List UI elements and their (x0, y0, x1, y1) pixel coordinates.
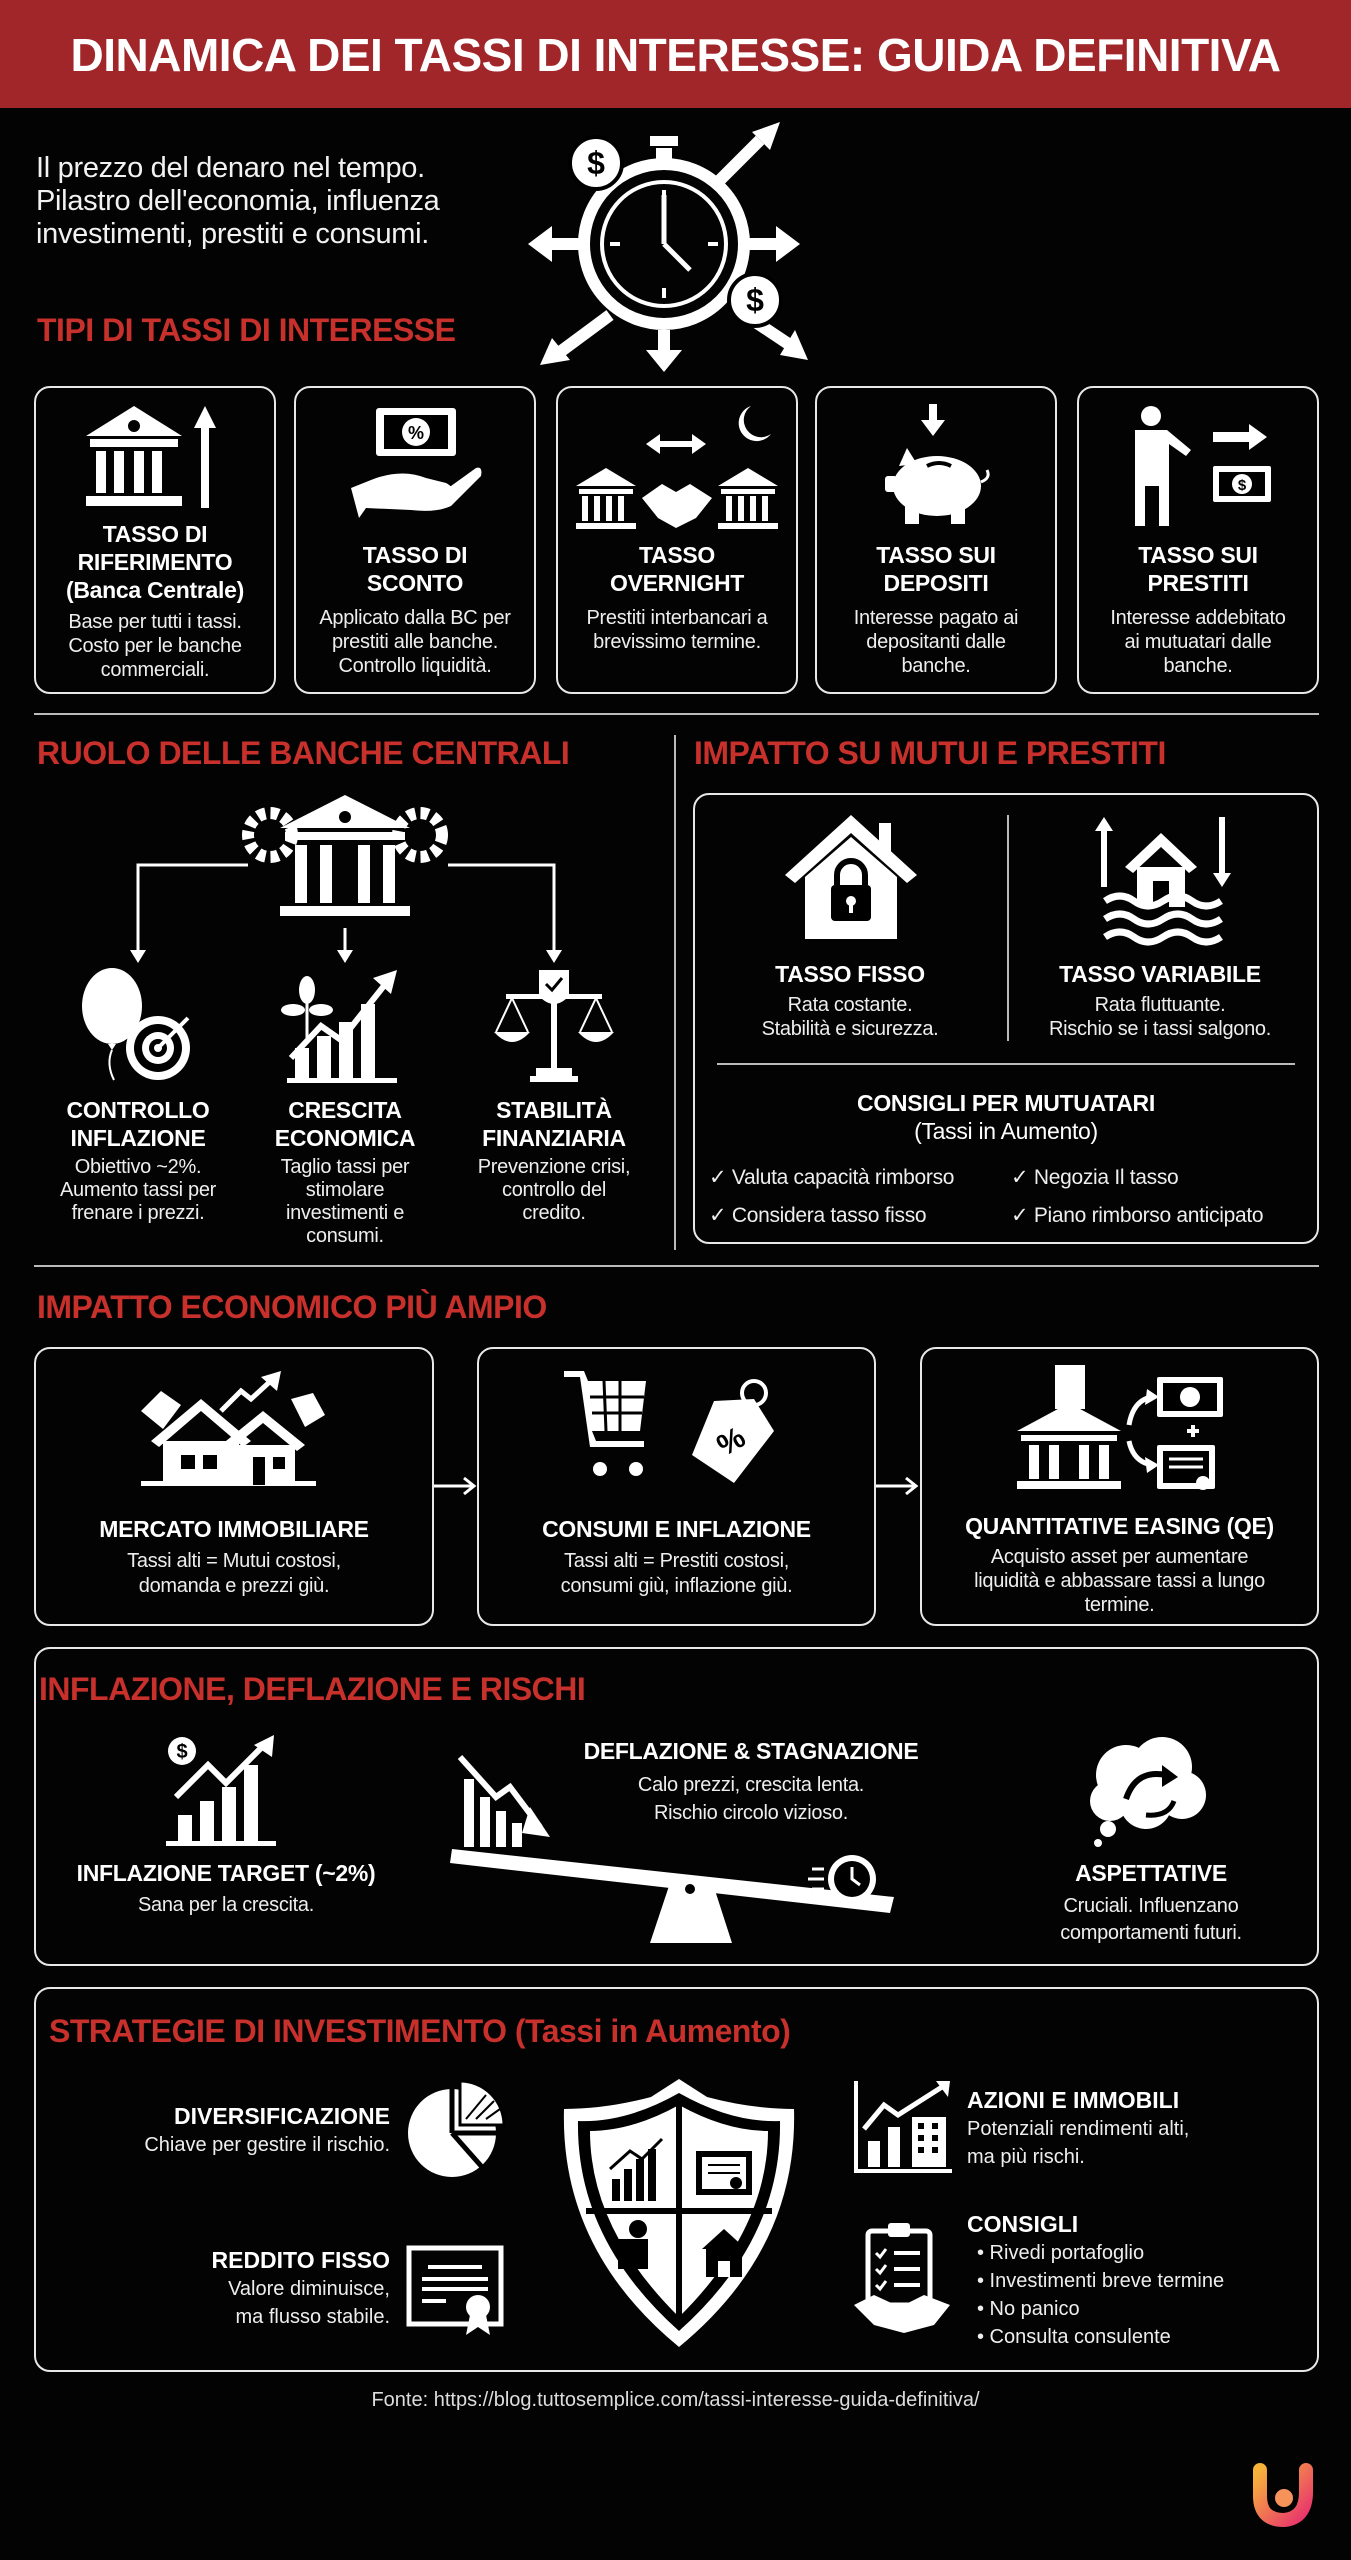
icon: hand with banknote (351, 408, 482, 518)
desc (1049, 994, 1271, 1040)
card desc: depositanti dalle (866, 631, 1006, 653)
text: azioni e immobili: AZIONI E IMMOBILI (967, 2087, 1179, 2113)
arrow (434, 1476, 476, 1496)
subheading: consigli per mutuatari: CONSIGLI PER MUTUATARI (857, 1090, 1155, 1116)
card title: RIFERIMENTO (78, 549, 232, 575)
text: azioni e immobili: Potenziali rendimenti alti, (967, 2118, 1189, 2140)
text: diversificazione: DIVERSIFICAZIONE (174, 2103, 390, 2129)
checklist: ✓ Piano rimborso anticipato (1011, 1204, 1263, 1227)
title: DINAMICA DEI TASSI DI INTERESSE: GUIDA DEFINITIVA (71, 29, 1280, 81)
header band (0, 0, 1351, 108)
text: azioni e immobili (967, 2085, 1307, 2171)
card title (1138, 542, 1258, 596)
desc (127, 1550, 341, 1597)
desc: Calo prezzi, crescita lenta. (638, 1774, 864, 1796)
checklist: ✓ Valuta capacità rimborso (709, 1166, 954, 1189)
card desc (854, 607, 1018, 677)
desc (536, 1771, 966, 1827)
panel: tasso overnight (556, 386, 798, 694)
icon: central bank with gears and arrows (130, 795, 562, 963)
icon: cart and tag (564, 1371, 774, 1483)
desc: investimenti e (286, 1202, 404, 1224)
desc (762, 994, 938, 1040)
desc: Taglio tassi per (281, 1156, 409, 1178)
icon: house with lock (785, 815, 917, 939)
title: deflazione: DEFLAZIONE & STAGNAZIONE (584, 1738, 918, 1764)
card title: (Banca Centrale) (66, 577, 244, 603)
desc: Stabilità e sicurezza. (762, 1018, 938, 1040)
title: QUANTITATIVE EASING (QE) (965, 1513, 1274, 1539)
title (275, 1097, 415, 1151)
desc: consumi. (306, 1225, 384, 1247)
title: tasso variabile: TASSO VARIABILE (1059, 961, 1261, 987)
column: controllo inflazione (60, 968, 216, 1224)
card title: TASSO DI (103, 521, 207, 547)
icon: hand with banknote: % (408, 423, 424, 443)
desc: frenare i prezzi. (72, 1202, 204, 1224)
intro text: Il prezzo del denaro nel tempo. (36, 152, 425, 184)
card title: TASSO (639, 542, 715, 568)
text: consigli: • Investimenti breve termine (977, 2270, 1224, 2292)
panel: consumi e inflazione (477, 1347, 876, 1626)
subheading: consigli per mutuatari (857, 1090, 1155, 1144)
text: reddito fisso: ma flusso stabile. (235, 2306, 390, 2328)
desc: Obiettivo ~2%. (75, 1156, 201, 1178)
icon: seesaw deflation (450, 1757, 910, 1942)
card desc: Costo per le banche (68, 635, 242, 657)
panel: quantitative easing (920, 1347, 1319, 1626)
panel: mutui e prestiti (693, 793, 1319, 1244)
card desc: Interesse pagato ai (854, 607, 1018, 629)
panel: tasso sui prestiti (1077, 386, 1319, 694)
card title (363, 542, 467, 596)
heading: impatto economico: IMPATTO ECONOMICO PIÙ AMPIO (37, 1289, 547, 1325)
icon: inflation chart: $ (176, 1741, 188, 1763)
desc: liquidità e abbassare tassi a lungo (974, 1570, 1265, 1592)
heading: STRATEGIE DI INVESTIMENTO (Tassi in Aumento) (49, 2013, 790, 2049)
card title (876, 542, 996, 596)
title: CONTROLLO (67, 1097, 209, 1123)
icon: certificate (406, 2245, 506, 2335)
card desc: banche. (901, 655, 971, 677)
desc: Aumento tassi per (60, 1179, 216, 1201)
checklist (709, 1166, 1263, 1227)
icon: houses with price tags (141, 1371, 325, 1486)
card title: SCONTO (367, 570, 463, 596)
panel: inflazione deflazione rischi (34, 1647, 1319, 1966)
title: STABILITÀ (496, 1097, 612, 1123)
card title: TASSO SUI (1138, 542, 1258, 568)
card desc: ai mutuatari dalle (1125, 631, 1271, 653)
desc: comportamenti futuri. (1060, 1922, 1242, 1944)
panel: strategie di investimento (34, 1987, 1319, 2372)
text: reddito fisso (76, 2245, 390, 2331)
desc: credito. (522, 1202, 586, 1224)
card desc: Applicato dalla BC per (319, 607, 511, 629)
text: consigli: CONSIGLI (967, 2211, 1078, 2237)
arrow (876, 1476, 921, 1496)
card desc (319, 607, 511, 677)
column: stabilità finanziaria (478, 970, 630, 1224)
heading: impatto su mutui: IMPATTO SU MUTUI E PRESTITI (694, 735, 1166, 771)
desc (1016, 1893, 1286, 1947)
icon: scales with shield (494, 970, 614, 1082)
icon: plant growth chart (281, 970, 397, 1083)
card desc: Base per tutti i tassi. (68, 611, 242, 633)
icon: clock with arrows: $ (746, 282, 764, 318)
icon: shield (562, 2079, 796, 2347)
desc (478, 1156, 630, 1224)
intro text (36, 152, 440, 250)
panel: mercato immobiliare (34, 1347, 434, 1626)
text: reddito fisso: REDDITO FISSO (212, 2247, 390, 2273)
desc: Sana per la crescita. (138, 1894, 314, 1916)
card desc: commerciali. (101, 659, 209, 681)
icon: person with banknote (1135, 406, 1271, 526)
desc: domanda e prezzi giù. (139, 1575, 329, 1597)
checklist: ✓ Considera tasso fisso (709, 1204, 926, 1227)
card desc: Interesse addebitato (1110, 607, 1286, 629)
desc: Tassi alti = Prestiti costosi, (564, 1550, 789, 1572)
text: reddito fisso: Valore diminuisce, (228, 2278, 390, 2300)
title: aspettative: ASPETTATIVE (1075, 1860, 1227, 1886)
text: consigli: • Rivedi portafoglio (977, 2242, 1144, 2264)
panel: tasso di riferimento (34, 386, 276, 694)
title: ECONOMICA (275, 1125, 415, 1151)
icon: banks handshake moon (576, 406, 778, 529)
card title: TASSO SUI (876, 542, 996, 568)
icon: bank with up arrow (86, 406, 216, 508)
card title: DEPOSITI (884, 570, 988, 596)
text: azioni e immobili: ma più rischi. (967, 2146, 1085, 2168)
title: CONSUMI E INFLAZIONE (542, 1516, 811, 1542)
text: diversificazione (76, 2101, 390, 2159)
icon: piggy bank (885, 404, 990, 524)
title: CRESCITA (288, 1097, 402, 1123)
icon: balloon and target (82, 968, 190, 1080)
card desc: banche. (1163, 655, 1233, 677)
icon: clock with arrows (528, 122, 808, 372)
icon: inflation chart (166, 1735, 281, 1847)
card desc (587, 607, 768, 653)
heading: tipi di tassi: TIPI DI TASSI DI INTERESSE (37, 312, 455, 348)
panel: tasso di sconto (294, 386, 536, 694)
desc: Tassi alti = Mutui costosi, (127, 1550, 341, 1572)
heading: INFLAZIONE, DEFLAZIONE E RISCHI (39, 1671, 585, 1707)
icon: logo (1250, 2462, 1312, 2524)
desc: controllo del (502, 1179, 606, 1201)
icon: clock with arrows: $ (587, 145, 605, 181)
desc: Acquisto asset per aumentare (991, 1546, 1248, 1568)
card desc: Controllo liquidità. (338, 655, 491, 677)
desc (281, 1156, 410, 1247)
desc: stimolare (306, 1179, 384, 1201)
title: inflazione target: INFLAZIONE TARGET (~2%) (77, 1860, 375, 1886)
text: consigli: • No panico (977, 2298, 1080, 2320)
card title: OVERNIGHT (610, 570, 744, 596)
text: diversificazione: Chiave per gestire il rischio. (144, 2134, 390, 2156)
title: FINANZIARIA (482, 1125, 626, 1151)
subheading: consigli per mutuatari: (Tassi in Aumento) (914, 1118, 1098, 1144)
card desc (1110, 607, 1286, 677)
desc: Rischio se i tassi salgono. (1049, 1018, 1271, 1040)
desc: Prevenzione crisi, (478, 1156, 630, 1178)
icon: stock chart with building (854, 2081, 954, 2176)
heading: ruolo banche centrali: RUOLO DELLE BANCHE CENTRALI (37, 735, 569, 771)
intro text: investimenti, prestiti e consumi. (36, 218, 429, 250)
icon: house with waves (1095, 817, 1231, 946)
panel: tasso sui depositi (815, 386, 1057, 694)
icon: bank with money and bond (1017, 1365, 1227, 1495)
card title (66, 521, 244, 603)
text: consigli: • Consulta consulente (977, 2326, 1171, 2348)
desc: Rata costante. (788, 994, 912, 1016)
title (67, 1097, 209, 1151)
title: tasso fisso: TASSO FISSO (775, 961, 925, 987)
icon: pie chart (406, 2081, 506, 2181)
desc (479, 1549, 874, 1599)
desc: termine. (1085, 1594, 1154, 1616)
card desc: Prestiti interbancari a (587, 607, 767, 629)
text: consigli (967, 2209, 1307, 2351)
card desc: prestiti alle banche. (332, 631, 498, 653)
title (482, 1097, 626, 1151)
card title: PRESTITI (1147, 570, 1249, 596)
desc: Cruciali. Influenzano (1064, 1895, 1238, 1917)
desc (60, 1156, 216, 1224)
column: crescita economica (275, 970, 415, 1247)
card desc: brevissimo termine. (593, 631, 761, 653)
desc (922, 1545, 1317, 1617)
intro text: Pilastro dell'economia, influenza (36, 185, 439, 217)
title: MERCATO IMMOBILIARE (99, 1516, 369, 1542)
title: INFLAZIONE (70, 1125, 206, 1151)
card title (610, 542, 744, 596)
icon: person with banknote: $ (1238, 477, 1247, 494)
icon: cart and tag: % (711, 1421, 751, 1463)
desc: consumi giù, inflazione giù. (561, 1575, 792, 1597)
icon: clipboard handshake (854, 2221, 954, 2333)
icon: thought cloud (1086, 1735, 1211, 1847)
checklist: ✓ Negozia Il tasso (1011, 1166, 1178, 1189)
desc: Rata fluttuante. (1095, 994, 1225, 1016)
source footer: Fonte: https://blog.tuttosemplice.com/tassi-interesse-guida-definitiva/ (371, 2389, 980, 2411)
desc: Rischio circolo vizioso. (654, 1802, 848, 1824)
card desc (68, 611, 242, 681)
card title: TASSO DI (363, 542, 467, 568)
